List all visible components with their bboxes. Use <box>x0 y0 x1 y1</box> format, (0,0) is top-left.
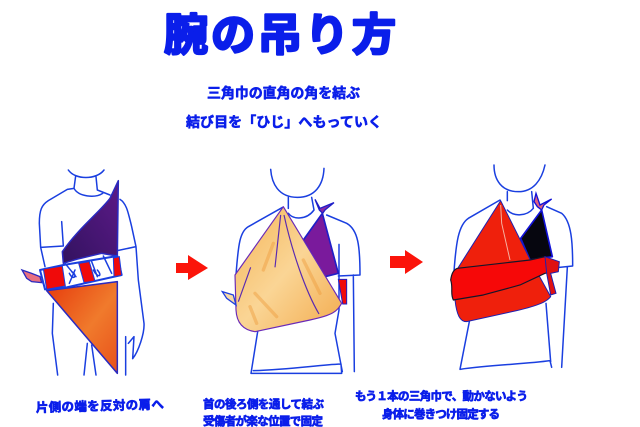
knot at shoulder <box>315 199 334 213</box>
caption 3: 身体に巻きつけ固定する <box>382 407 500 421</box>
red sling <box>455 201 551 322</box>
knot at left <box>222 292 236 305</box>
figure 2: tied behind the neck <box>222 168 360 373</box>
purple triangle <box>303 213 338 277</box>
yellow triangular sling <box>235 207 342 332</box>
purple triangle on chest <box>62 181 118 263</box>
body outline <box>236 168 360 373</box>
sling fold lines <box>501 205 510 260</box>
sling fold lines <box>238 215 319 314</box>
knot at shoulder <box>534 193 552 210</box>
folded band with red panels <box>40 256 122 289</box>
sling texture streaks <box>250 243 320 323</box>
band knot and tail <box>545 257 559 295</box>
caption 3: もう１本の三角巾で、動かないよう <box>355 389 528 403</box>
figure 3: second bandage wrapped around body <box>451 165 573 369</box>
arrow 2 <box>390 250 423 274</box>
arrow 1 <box>176 255 208 280</box>
figure 1: spreading the triangular bandage <box>22 170 144 375</box>
black triangle <box>521 210 552 260</box>
subheading line 1: 三角巾の直角の角を結ぶ <box>207 85 360 101</box>
orange triangle hanging <box>47 282 117 373</box>
body outline <box>39 170 144 375</box>
caption 2 <box>203 397 324 427</box>
body outline <box>454 165 573 369</box>
subheading line 2: 結び目を「ひじ」へもっていく <box>186 114 382 130</box>
caption 3 <box>355 389 528 421</box>
wrap band <box>451 257 558 300</box>
red arm band <box>338 279 347 304</box>
knot tail at left <box>22 270 42 283</box>
title: 腕の吊り方 <box>164 11 396 60</box>
caption 2: 首の後ろ側を通して結ぶ <box>203 397 324 411</box>
caption 1: 片側の端を反対の肩へ <box>36 397 165 415</box>
